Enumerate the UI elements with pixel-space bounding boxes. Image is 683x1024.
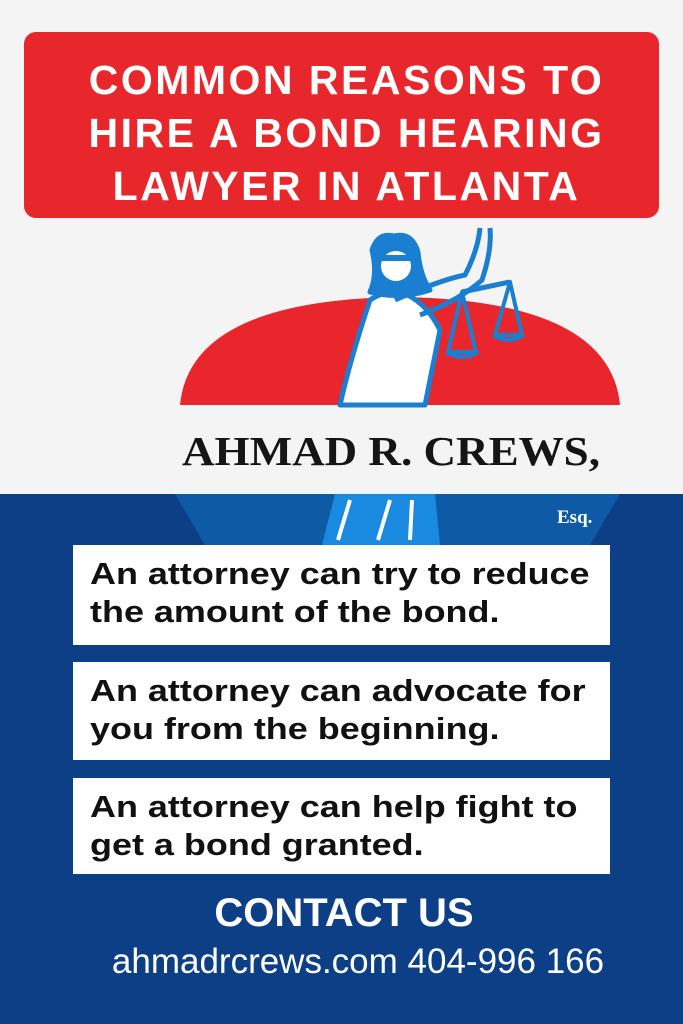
reason 2: An attorney can advocate for (90, 673, 586, 708)
title: HIRE A BOND HEARING (88, 110, 604, 156)
reason 3: An attorney can help fight to (90, 789, 577, 824)
reason 1 (73, 545, 610, 645)
background top (0, 0, 683, 494)
title (24, 32, 659, 218)
red semicircle (180, 297, 620, 405)
esq: Esq. (557, 507, 592, 528)
reason 2: you from the beginning. (90, 711, 500, 746)
reason 3: get a bond granted. (90, 827, 424, 862)
contact details: ahmadrcrews.com 404-996 166 (112, 942, 604, 981)
name: AHMAD R. CREWS, (182, 428, 600, 474)
reason 1: the amount of the bond. (90, 594, 499, 629)
lighter blue lower section (175, 494, 620, 545)
reason 3 (73, 778, 610, 874)
reason 1: An attorney can try to reduce (90, 556, 590, 591)
reason 2 (73, 662, 610, 760)
logo (175, 228, 620, 545)
contact heading: CONTACT US (214, 891, 474, 935)
figure: lady justice (322, 228, 524, 545)
title: COMMON REASONS TO (89, 57, 604, 103)
title: LAWYER IN ATLANTA (113, 163, 580, 209)
